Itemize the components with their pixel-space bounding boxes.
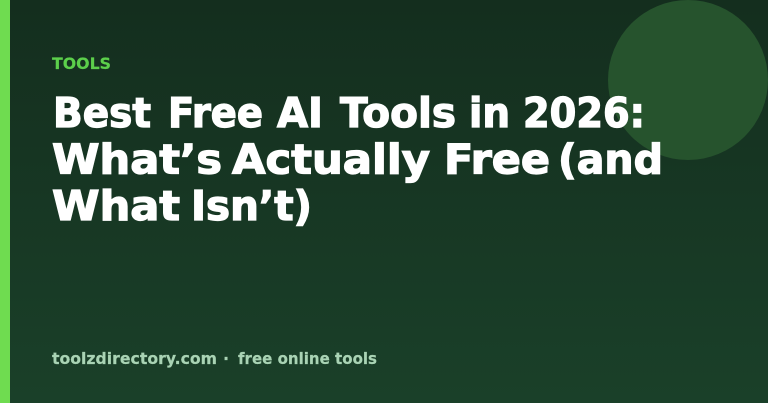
title: Isn’t) (191, 182, 312, 230)
left accent bar (0, 0, 10, 403)
category label: TOOLS (52, 54, 111, 73)
title: Tools (340, 89, 456, 137)
title: What’s (52, 136, 222, 184)
title: (and (558, 136, 663, 184)
title: What (52, 182, 180, 230)
decorative circle (608, 0, 768, 160)
title: AI (277, 89, 323, 137)
footer text: free online tools (238, 349, 377, 368)
title: Free (444, 136, 550, 184)
title: 2026: (523, 89, 645, 137)
footer text: · (223, 349, 229, 368)
footer text: toolzdirectory.com (52, 349, 217, 368)
title (52, 89, 663, 230)
title: Free (168, 89, 263, 137)
footer text (52, 349, 377, 368)
title: Best (53, 89, 151, 137)
title: in (469, 89, 510, 137)
title: Actually (232, 136, 430, 184)
